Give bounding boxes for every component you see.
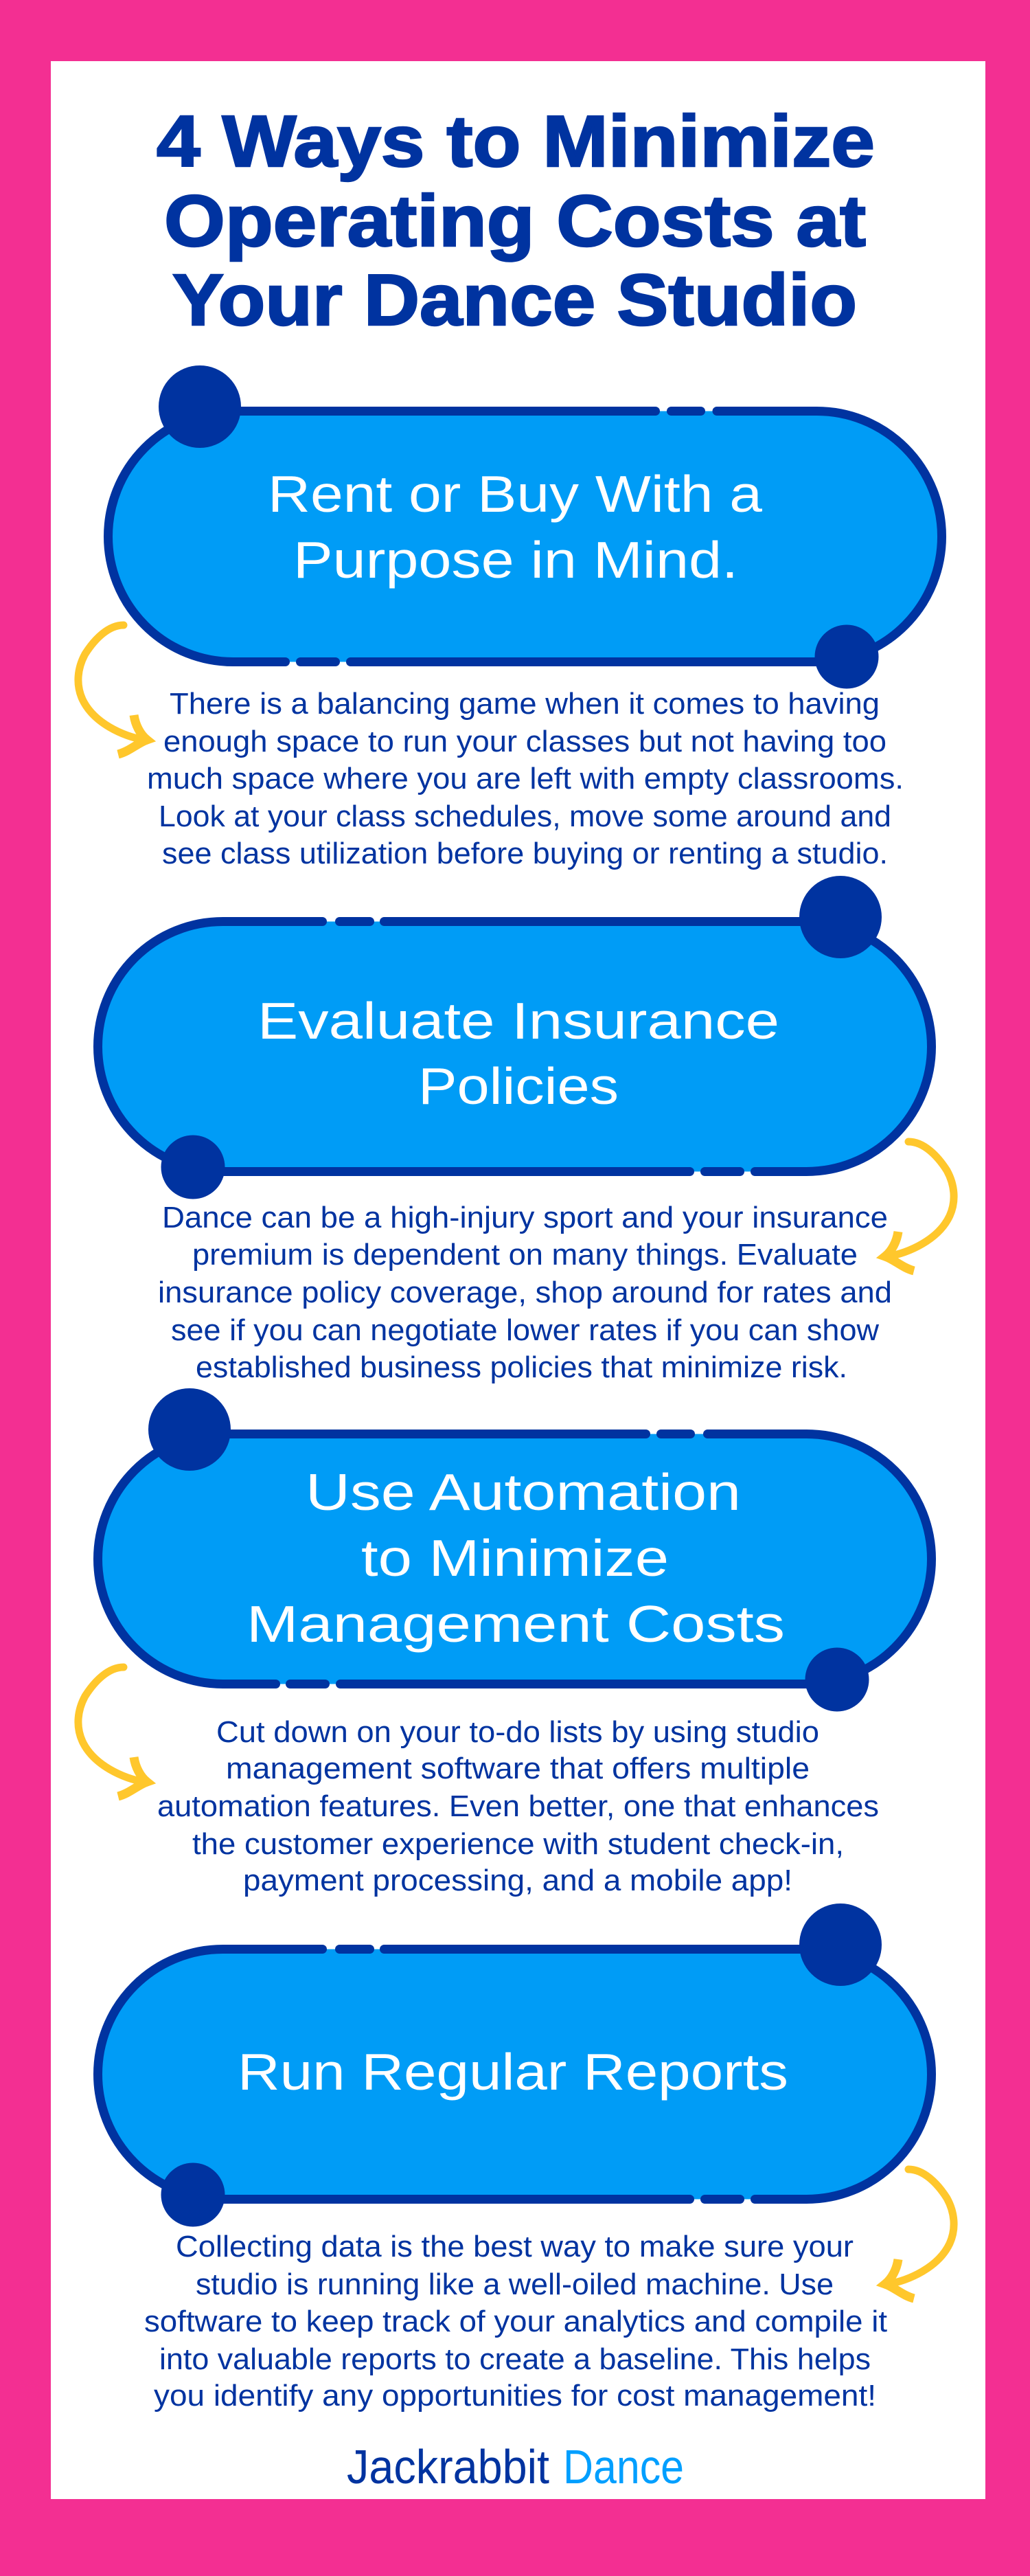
text block: step 3 body: automation features. Even better, one that enhances — [157, 1789, 879, 1823]
text block: step 4 body: you identify any opportunities for cost management! — [154, 2379, 876, 2413]
panel: step 1 heading pill: Purpose in Mind. — [293, 531, 738, 589]
title: Operating Costs at — [164, 181, 866, 262]
text block: step 1 body: Look at your class schedules, move some around and — [159, 800, 891, 833]
panel: step 3 heading pill: to Minimize — [361, 1529, 669, 1587]
panel: step 4 heading pill: Run Regular Reports — [238, 2043, 788, 2101]
arrow: step 3 — [78, 1667, 147, 1796]
panel: step 2 heading pill: Evaluate Insurance — [258, 992, 779, 1050]
text block: step 2 body: insurance policy coverage, shop around for rates and — [158, 1276, 892, 1309]
panel: step 3 heading pill: Management Costs — [247, 1595, 785, 1653]
logo: Jackrabbit Dance — [347, 2440, 684, 2494]
title — [157, 101, 875, 341]
text block: step 1 body: There is a balancing game when it comes to having — [170, 687, 880, 721]
text block: step 4 body: Collecting data is the best way to make sure your — [176, 2230, 854, 2263]
panel: step 3 heading pill — [98, 1388, 931, 1712]
text block: step 2 body: premium is dependent on many things. Evaluate — [192, 1238, 858, 1272]
panel: step 2 heading pill: Policies — [418, 1057, 619, 1115]
panel: step 1 heading pill: Rent or Buy With a — [268, 465, 762, 523]
text block: step 3 body: management software that offers multiple — [226, 1752, 810, 1785]
text block: step 2 body — [158, 1201, 892, 1384]
arrow: step 1 — [78, 625, 147, 754]
text block: step 4 body: into valuable reports to create a baseline. This helps — [159, 2342, 871, 2376]
text block: step 2 body: established business policies that minimize risk. — [196, 1351, 847, 1384]
text block: step 1 body: see class utilization before buying or renting a studio. — [162, 837, 888, 870]
title: Your Dance Studio — [172, 260, 857, 341]
text block: step 1 body: enough space to run your classes but not having too — [163, 725, 886, 758]
arrow: step 4 — [885, 2169, 954, 2298]
text block: step 4 body: software to keep track of your analytics and compile it — [144, 2305, 887, 2338]
logo: Jackrabbit Dance: Jackrabbit — [347, 2440, 549, 2494]
panel: step 3 heading pill: Use Automation — [306, 1463, 741, 1521]
text block: step 2 body: see if you can negotiate lower rates if you can show — [171, 1313, 879, 1347]
text block: step 4 body: studio is running like a well-oiled machine. Use — [196, 2268, 834, 2301]
text block: step 3 body — [157, 1715, 879, 1897]
panel: step 2 heading pill — [98, 876, 931, 1199]
text block: step 4 body — [144, 2230, 887, 2413]
text block: step 3 body: Cut down on your to-do lists by using studio — [216, 1715, 819, 1749]
text block: step 3 body: the customer experience with student check-in, — [192, 1827, 844, 1861]
text block: step 1 body — [147, 687, 904, 870]
text block: step 1 body: much space where you are left with empty classrooms. — [147, 762, 904, 795]
panel: step 4 heading pill — [98, 1903, 931, 2227]
panel: step 1 heading pill — [108, 365, 942, 688]
logo: Jackrabbit Dance: Dance — [563, 2440, 684, 2494]
arrow: step 2 — [885, 1142, 954, 1271]
title: 4 Ways to Minimize — [157, 101, 875, 182]
text block: step 3 body: payment processing, and a mobile app! — [243, 1864, 792, 1897]
text block: step 2 body: Dance can be a high-injury sport and your insurance — [162, 1201, 888, 1234]
